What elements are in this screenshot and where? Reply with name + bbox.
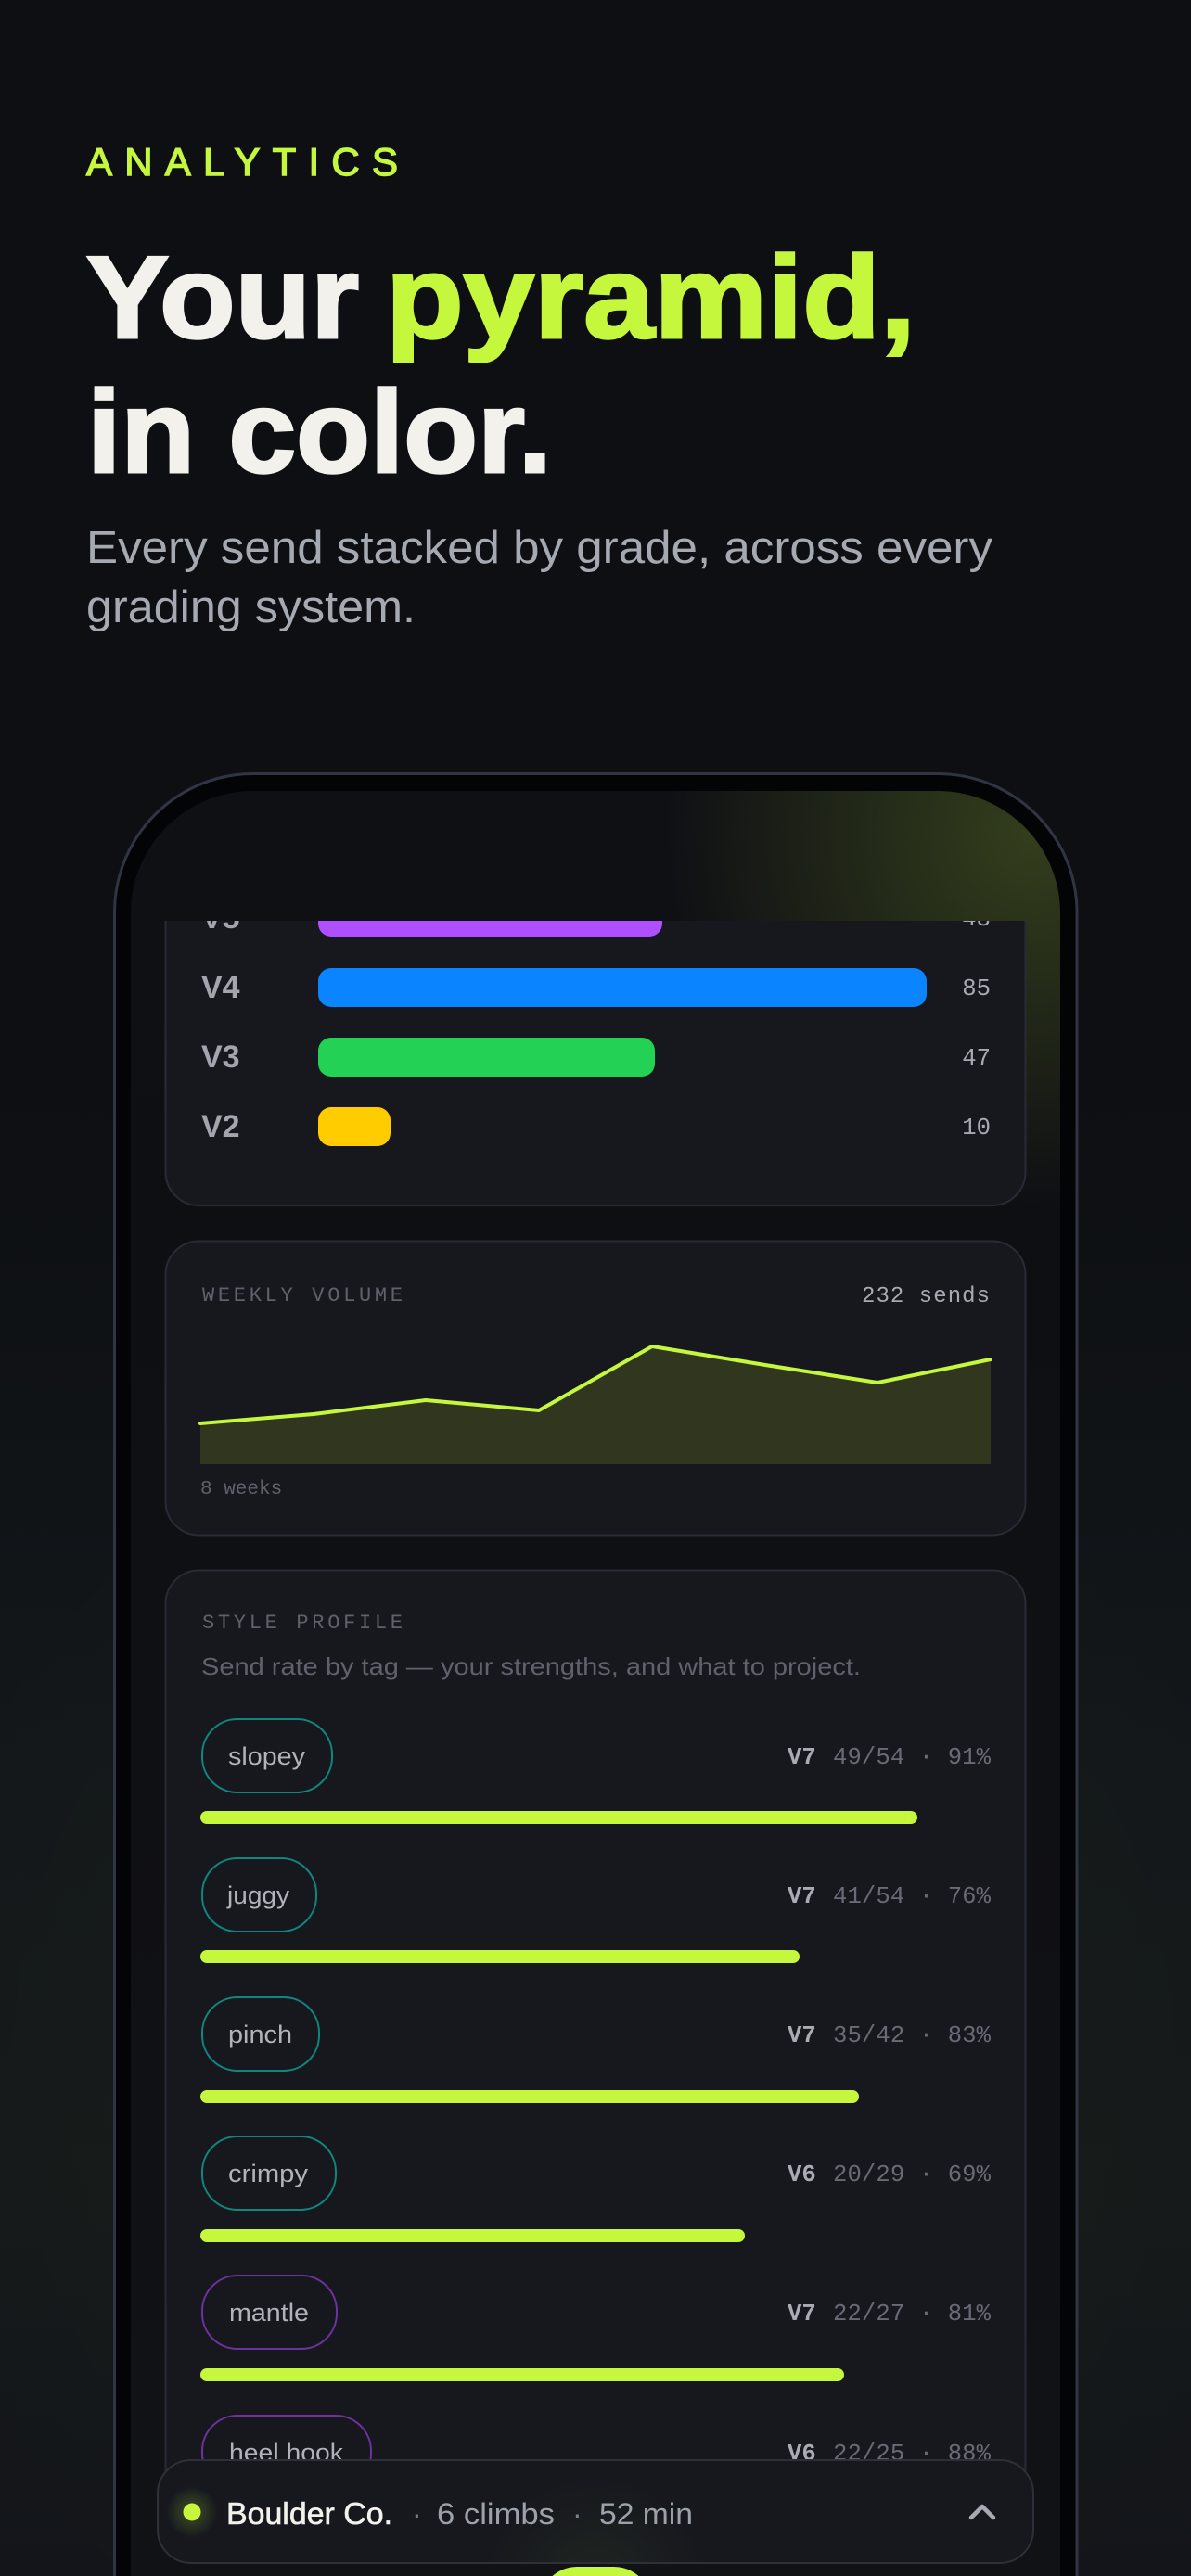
panel: grade pyramid [165, 921, 1026, 1206]
scrolling content [165, 921, 1026, 2472]
row: mantle: mantle [229, 2299, 309, 2327]
panel: style profile [165, 1569, 1026, 2472]
row: heel hook: 22/25 · 88% [833, 2441, 992, 2468]
session stats: 6 climbs [437, 2497, 555, 2531]
session stats: · [412, 2497, 422, 2531]
row: mantle [200, 2276, 992, 2381]
row: juggy: 41/54 · 76% [833, 1883, 992, 1910]
row: slopey: 49/54 · 91% [833, 1744, 992, 1771]
row: V5: V5 [201, 900, 240, 936]
row: V5: 48 [962, 906, 991, 933]
icon: chevron up [971, 2506, 993, 2518]
session stats: · [572, 2497, 583, 2531]
row: slopey [200, 1719, 992, 1824]
subtitle [86, 523, 993, 632]
tab bar background [131, 2504, 1060, 2576]
subtitle: Every send stacked by grade, across every [86, 523, 993, 573]
row: crimpy: 20/29 · 69% [833, 2162, 992, 2188]
row: V4: V4 [201, 970, 240, 1005]
row: slopey: V7 [788, 1744, 816, 1771]
heading: weekly volume: WEEKLY VOLUME [202, 1284, 403, 1307]
row: mantle: 22/27 · 81% [833, 2301, 992, 2327]
active tab button [540, 2567, 651, 2576]
session stats [412, 2497, 693, 2531]
row: V3: V3 [201, 1039, 240, 1075]
row: pinch: V7 [788, 2022, 816, 2049]
row: mantle: V7 [788, 2301, 816, 2327]
row: crimpy [200, 2136, 992, 2242]
heading: style profile: STYLE PROFILE [202, 1612, 403, 1635]
row: juggy: juggy [226, 1881, 290, 1909]
panel: weekly volume [165, 1241, 1026, 1536]
gym name: Boulder Co. [226, 2496, 392, 2531]
eyebrow: analytics: ANALYTICS [86, 140, 398, 184]
row: V3 [201, 1038, 991, 1077]
row: heel hook: heel hook [229, 2439, 344, 2467]
icon: live dot [166, 2486, 218, 2538]
row: heel hook [201, 2415, 991, 2459]
row: slopey: slopey [228, 1742, 306, 1770]
row: V3: 47 [962, 1045, 991, 1072]
phone screen [131, 791, 1060, 2576]
phone frame [115, 773, 1077, 2576]
row: crimpy: V6 [788, 2162, 816, 2188]
row: V2: 10 [962, 1115, 991, 1141]
row: pinch: pinch [228, 2021, 292, 2048]
description: Send rate by tag — your strengths, and what to project. [201, 1652, 861, 1680]
title: pyramid, [386, 232, 916, 363]
row: juggy: V7 [788, 1883, 816, 1910]
row: V2: V2 [201, 1109, 240, 1144]
row: pinch: 35/42 · 83% [833, 2022, 992, 2049]
row: V5 [207, 921, 989, 937]
caption: 8 weeks: 8 weeks [200, 1479, 282, 1500]
row: juggy [200, 1858, 992, 1963]
row: V4: 85 [962, 976, 991, 1002]
title [86, 232, 916, 497]
subtitle: grading system. [86, 582, 416, 632]
row: crimpy: crimpy [228, 2160, 309, 2187]
title: in color. [87, 366, 552, 497]
row: V2 [201, 1107, 991, 1146]
title: Your [86, 232, 359, 363]
row: pinch [200, 1997, 992, 2103]
session bar [158, 2460, 1033, 2563]
total: sends: 232 sends [862, 1284, 990, 1309]
area chart [200, 1346, 991, 1464]
session stats: 52 min [599, 2497, 693, 2531]
row: heel hook: V6 [788, 2441, 816, 2468]
row: V4 [201, 968, 991, 1007]
